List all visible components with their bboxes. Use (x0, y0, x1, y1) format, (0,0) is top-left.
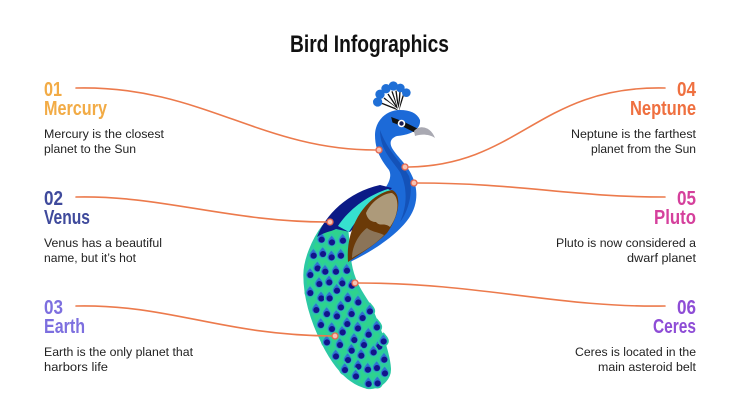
wing (317, 185, 398, 262)
item 02 Venus: 02 (44, 188, 63, 210)
title: Bird Infographics (290, 31, 449, 58)
item 06 Ceres: main asteroid belt (598, 360, 697, 374)
item 04 Neptune: Neptune is the farthest (571, 127, 697, 141)
item 04 Neptune: Neptune (630, 98, 696, 120)
connector line 1 (76, 88, 375, 150)
item 01 Mercury: Mercury (44, 98, 108, 120)
item 03 Earth: Earth is the only planet that (44, 345, 194, 359)
item 01 Mercury: 01 (44, 79, 62, 101)
item 03 Earth: 03 (44, 297, 63, 319)
beak (414, 127, 435, 138)
item 01 Mercury: Mercury is the closest (44, 127, 165, 141)
item 05 Pluto (556, 188, 697, 265)
peacock illustration (305, 81, 435, 388)
item 01 Mercury (44, 79, 165, 156)
item 02 Venus (44, 188, 162, 265)
item 01 Mercury: planet to the Sun (44, 142, 136, 156)
item 04 Neptune (571, 79, 697, 156)
item 05 Pluto: Pluto (654, 207, 696, 229)
peacock body and neck (350, 110, 420, 262)
item 06 Ceres: Ceres (653, 316, 696, 338)
peacock crest (373, 81, 411, 110)
peacock face (392, 118, 435, 138)
peacock tail (305, 227, 389, 388)
item 02 Venus: Venus (44, 207, 90, 229)
item 05 Pluto: dwarf planet (627, 251, 697, 265)
item 02 Venus: name, but it’s hot (44, 251, 137, 265)
item 03 Earth (44, 297, 194, 374)
neck highlight (380, 130, 411, 222)
connector dots (327, 147, 417, 339)
item 05 Pluto: Pluto is now considered a (556, 236, 696, 250)
item 06 Ceres (575, 297, 697, 374)
item 06 Ceres: Ceres is located in the (575, 345, 696, 359)
connector line 4 (409, 88, 665, 167)
item 03 Earth: harbors life (44, 360, 108, 374)
connector line 5 (417, 183, 665, 197)
item 04 Neptune: 04 (677, 79, 697, 101)
item 04 Neptune: planet from the Sun (591, 142, 696, 156)
item 05 Pluto: 05 (677, 188, 696, 210)
item 03 Earth: Earth (44, 316, 85, 338)
connector line 6 (358, 283, 665, 306)
item 06 Ceres: 06 (677, 297, 696, 319)
connector line 3 (76, 306, 332, 336)
item 02 Venus: Venus has a beautiful (44, 236, 162, 250)
connector line 2 (76, 197, 327, 222)
